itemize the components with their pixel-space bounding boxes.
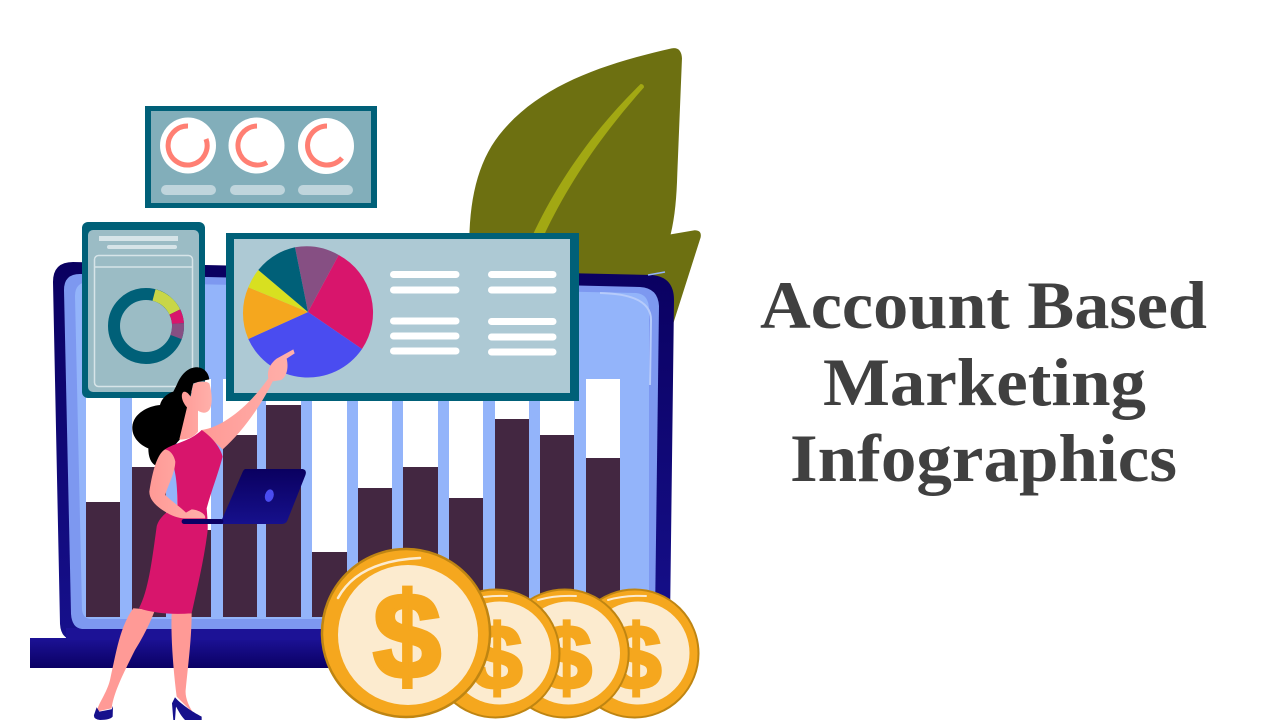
panel: pie chart (226, 233, 579, 401)
woman presenter (94, 349, 306, 720)
monitor screen (75, 282, 649, 619)
coin 2 (432, 590, 560, 718)
coin 4 (570, 590, 698, 718)
monitor stand base (30, 638, 350, 668)
legs (97, 608, 195, 715)
laptop (182, 469, 306, 524)
bent arm (149, 449, 205, 518)
gauge 2 (228, 118, 284, 174)
title: Infographics (790, 420, 1177, 496)
donut chart (114, 294, 178, 358)
coin 1: $ (373, 568, 441, 704)
gauge 1 (160, 118, 216, 174)
leaf vein (532, 84, 644, 237)
panel: tablet (82, 222, 205, 398)
coin 3: $ (541, 607, 592, 709)
dress (139, 430, 223, 614)
bar chart (86, 379, 620, 617)
coin 4: $ (610, 607, 662, 709)
coin 1 (322, 549, 490, 717)
hair (132, 367, 209, 466)
pie chart (243, 246, 373, 377)
neck and face (179, 382, 212, 439)
coin 3 (501, 590, 629, 718)
title (760, 267, 1207, 496)
gauge 3 (298, 118, 354, 174)
raised arm (202, 349, 295, 449)
text lines (394, 274, 553, 352)
monitor bezel (64, 274, 659, 629)
title: Account Based (760, 267, 1207, 343)
shoes (94, 697, 202, 720)
coin 2: $ (471, 607, 523, 709)
monitor frame (53, 262, 674, 640)
panel: gauges (145, 106, 377, 208)
leaf (469, 48, 701, 323)
monitor (30, 262, 674, 668)
title: Marketing (823, 344, 1146, 420)
gauge labels (161, 185, 353, 195)
coins (322, 549, 698, 718)
